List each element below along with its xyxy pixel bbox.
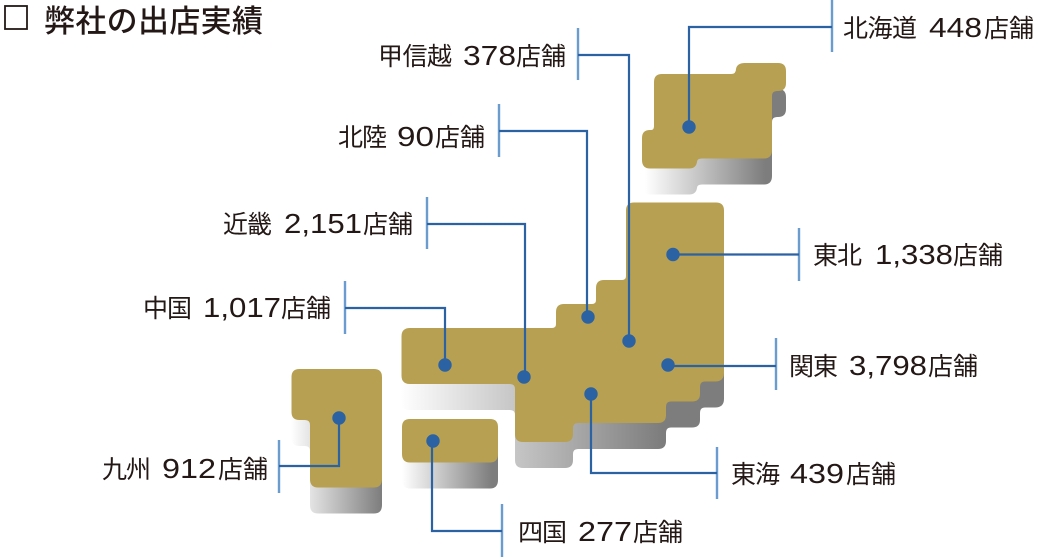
- callout: 関東: 店舗: [928, 353, 978, 381]
- callout: 東北: [666, 228, 1003, 281]
- region shape: Shikoku: [402, 419, 498, 488]
- callout: 九州: 912: [162, 453, 216, 484]
- callout: 北陸: 北陸: [338, 124, 387, 152]
- callout: 北陸: 店舗: [435, 124, 485, 152]
- title: 弊社の出店実績: [44, 4, 263, 39]
- callout: 中国: 中国: [143, 295, 192, 323]
- callout: 北海道: [682, 0, 1034, 134]
- callout: 四国: 277: [578, 516, 632, 547]
- callout: 甲信越: 甲信越: [378, 43, 452, 71]
- callout: 東北: 1,338: [875, 239, 953, 270]
- callout: 近畿: [223, 197, 531, 384]
- callout: 甲信越: 店舗: [516, 43, 566, 71]
- callout: 北海道: 店舗: [984, 15, 1034, 43]
- callout: 東北: 東北: [813, 242, 862, 270]
- callout: 近畿: 2,151: [284, 208, 362, 239]
- callout: 中国: [143, 281, 452, 372]
- callout: 近畿: 近畿: [223, 211, 272, 239]
- callout: 東北: 店舗: [953, 242, 1003, 270]
- callout: 四国: 四国: [518, 519, 567, 547]
- callout: 中国: 店舗: [281, 295, 331, 323]
- callout: 九州: 九州: [102, 456, 151, 484]
- callout: 四国: 店舗: [633, 519, 683, 547]
- region shape: Kyushu: [292, 369, 382, 514]
- map of Japan: [292, 63, 786, 514]
- callout: 東海: 439: [790, 458, 844, 489]
- callout: 関東: 3,798: [849, 350, 927, 381]
- callout: 北海道: 北海道: [843, 15, 917, 43]
- region shape: Honshu: [402, 202, 724, 468]
- callout: 関東: 関東: [789, 353, 838, 381]
- callout: 東海: [584, 387, 896, 499]
- callout: 四国: [426, 434, 683, 557]
- callout: 九州: 店舗: [218, 456, 268, 484]
- callout: 関東: [661, 338, 978, 390]
- callout: 中国: 1,017: [203, 292, 281, 323]
- callout: 九州: [102, 411, 346, 493]
- callout: 北海道: 448: [929, 12, 982, 43]
- region shape: Hokkaido: [642, 63, 786, 194]
- callout: 近畿: 店舗: [363, 211, 413, 239]
- callout: 甲信越: 378: [463, 40, 516, 71]
- callout: 東海: 店舗: [846, 461, 896, 489]
- callout: 北陸: 90: [397, 121, 434, 152]
- callout: 北陸: [338, 104, 595, 324]
- callout: 東海: 東海: [731, 461, 780, 489]
- callout: 甲信越: [378, 28, 636, 348]
